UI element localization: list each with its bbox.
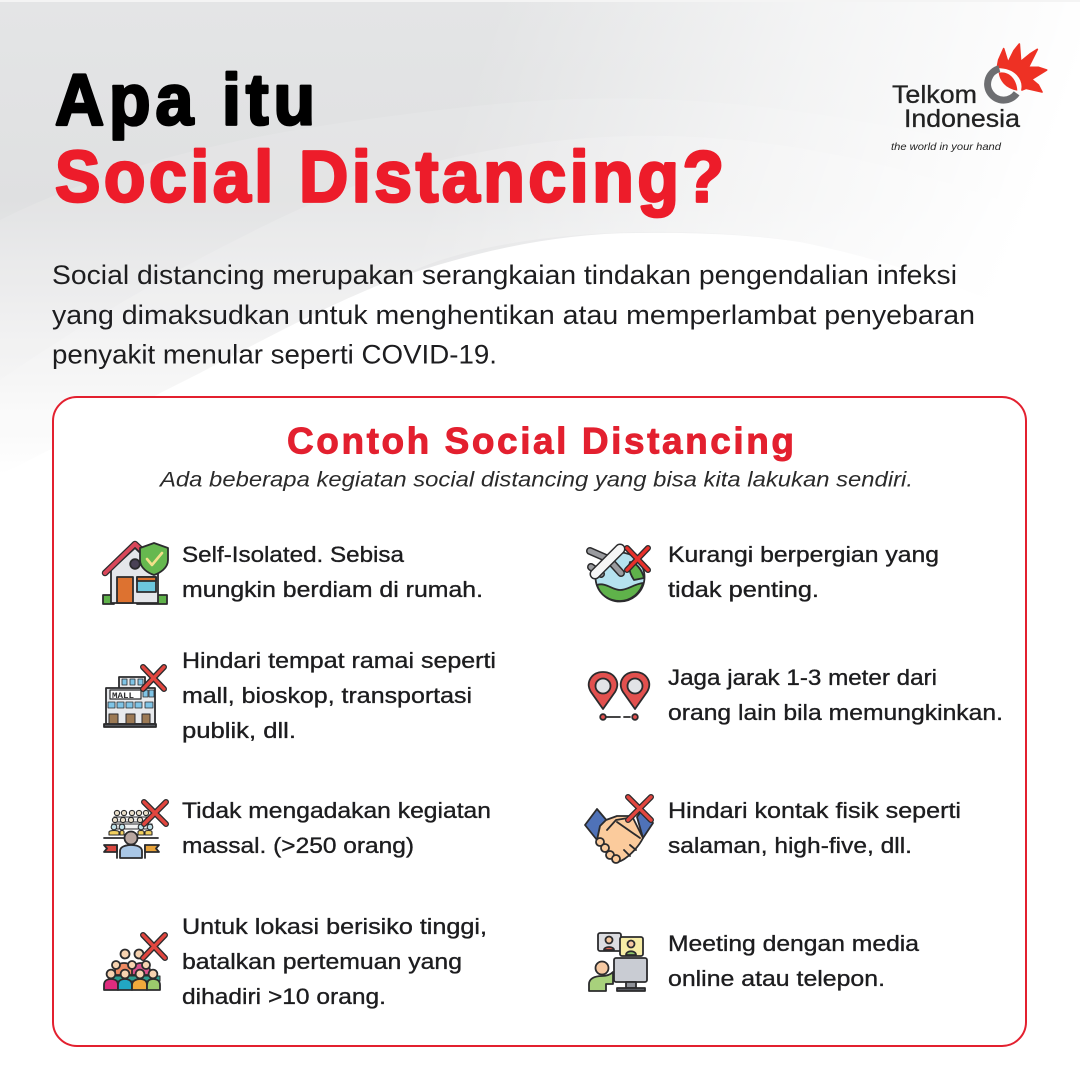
text: kurangi berpergian bbox=[668, 542, 939, 602]
intro paragraph: Social distancing merupakan serangkaian tindakan pengendalian infeksi bbox=[52, 260, 957, 290]
icon: handshake crossed out bbox=[585, 797, 653, 863]
icon: online meeting bbox=[589, 933, 647, 991]
icon: globe and plane crossed out bbox=[590, 548, 648, 602]
logo tagline: the world in your hand bbox=[891, 141, 1002, 153]
text: hindari tempat ramai bbox=[182, 648, 496, 743]
logo wordmark: Telkom bbox=[892, 81, 977, 109]
icon: group crossed out bbox=[104, 935, 165, 990]
text: kurangi berpergian: tidak penting. bbox=[668, 577, 819, 602]
text: lokasi berisiko tinggi: Untuk lokasi berisiko tinggi, bbox=[182, 914, 487, 939]
logo mark bbox=[988, 44, 1047, 100]
icon: mall crossed out bbox=[104, 667, 164, 727]
intro paragraph: yang dimaksudkan untuk menghentikan atau memperlambat penyebaran bbox=[52, 300, 975, 330]
text: jaga jarak: orang lain bila memungkinkan. bbox=[668, 700, 1003, 725]
text: hindari tempat ramai: publik, dll. bbox=[182, 718, 296, 743]
text: meeting online bbox=[668, 931, 920, 991]
text: kurangi berpergian: Kurangi berpergian yang bbox=[668, 542, 939, 567]
text: lokasi berisiko tinggi bbox=[182, 914, 487, 1009]
intro paragraph bbox=[52, 260, 975, 370]
icon: mall crossed out: MALL bbox=[112, 692, 134, 701]
text: jaga jarak: Jaga jarak 1-3 meter dari bbox=[668, 665, 937, 690]
icon: two map pins bbox=[589, 672, 649, 720]
title line 2: Social Distancing? bbox=[55, 137, 724, 217]
text: hindari tempat ramai: Hindari tempat ramai seperti bbox=[182, 648, 496, 673]
text: lokasi berisiko tinggi: batalkan pertemuan yang bbox=[182, 949, 462, 974]
text: hindari tempat ramai: mall, bioskop, transportasi bbox=[182, 683, 472, 708]
text: kegiatan massal bbox=[182, 798, 491, 858]
logo: Telkom Indonesia: Indonesia bbox=[904, 105, 1020, 133]
text: lokasi berisiko tinggi: dihadiri >10 orang. bbox=[182, 984, 386, 1009]
text: jaga jarak bbox=[668, 665, 1003, 725]
panel: contoh social distancing bbox=[53, 397, 1026, 1046]
text: kegiatan massal: Tidak mengadakan kegiatan bbox=[182, 798, 491, 823]
text: meeting online: online atau telepon. bbox=[668, 966, 885, 991]
intro paragraph: penyakit menular seperti COVID-19. bbox=[52, 340, 497, 370]
text: self-isolated: Self-Isolated. Sebisa bbox=[182, 542, 405, 567]
text: meeting online: Meeting dengan media bbox=[668, 931, 920, 956]
logo: Telkom Indonesia bbox=[891, 44, 1047, 153]
text: self-isolated bbox=[182, 542, 483, 602]
title line 1: Apa itu bbox=[55, 60, 315, 140]
text: hindari kontak fisik: salaman, high-five, dll. bbox=[668, 833, 912, 858]
panel heading: Contoh Social Distancing bbox=[287, 420, 794, 462]
panel subtitle: Ada beberapa kegiatan social distancing yang bisa kita lakukan sendiri. bbox=[158, 468, 913, 492]
text: self-isolated: mungkin berdiam di rumah. bbox=[182, 577, 483, 602]
text: hindari kontak fisik bbox=[668, 798, 961, 858]
icon: house with shield bbox=[103, 543, 168, 604]
text: kegiatan massal: massal. (>250 orang) bbox=[182, 833, 414, 858]
icon: mass event crossed out bbox=[104, 802, 166, 858]
text: hindari kontak fisik: Hindari kontak fisik seperti bbox=[668, 798, 961, 823]
